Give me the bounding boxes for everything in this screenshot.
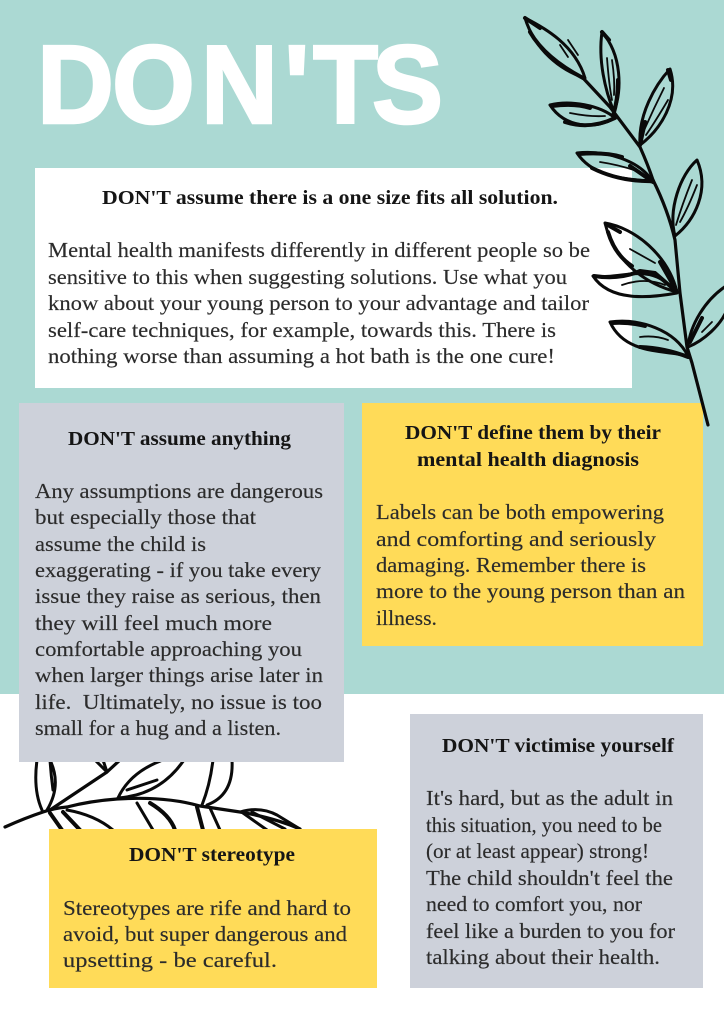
- panel body: define them: illness.: [376, 606, 437, 630]
- panel body: victimise: need to comfort you, nor: [426, 892, 642, 916]
- panel body: define them: Labels can be both empowering: [376, 500, 664, 524]
- panel body: one size: nothing worse than assuming a hot bath is the one cure!: [48, 344, 555, 368]
- panel body: assume anything: life. Ultimately, no issue is too: [35, 690, 322, 714]
- panel heading: define them: DON'T define them by their: [405, 422, 661, 444]
- panel: define them: [362, 403, 703, 646]
- panel body: victimise: feel like a burden to you for: [426, 919, 675, 943]
- teal background: [0, 0, 724, 694]
- panel body: victimise: this situation, you need to be: [426, 813, 662, 837]
- panel body: victimise: (or at least appear) strong!: [426, 839, 649, 863]
- panel body: assume anything: small for a hug and a listen.: [35, 716, 281, 740]
- panel heading: stereotype: DON'T stereotype: [129, 844, 295, 866]
- panel body: assume anything: they will feel much more: [35, 611, 272, 635]
- panel body: assume anything: when larger things arise later in: [35, 663, 323, 687]
- panel: assume anything: [19, 403, 344, 762]
- panel heading: define them: mental health diagnosis: [417, 449, 639, 471]
- icon: lower leaf branch: [5, 760, 300, 830]
- panel heading: assume anything: DON'T assume anything: [68, 428, 292, 450]
- panel body: stereotype: [63, 896, 351, 972]
- panel body: one size: self-care techniques, for example, towards this. There is: [48, 318, 556, 342]
- panel body: stereotype: Stereotypes are rife and hard to: [63, 896, 351, 920]
- panel body: assume anything: Any assumptions are dangerous: [35, 479, 323, 503]
- icon: upper leaf branch: [525, 18, 724, 425]
- panel body: one size: know about your young person to your advantage and tailor: [48, 291, 589, 315]
- panel heading: one size: DON'T assume there is a one size fits all solution.: [102, 187, 558, 209]
- panel body: assume anything: [35, 479, 323, 740]
- panel body: define them: [376, 500, 685, 630]
- panel: stereotype: [49, 829, 377, 988]
- panel body: assume anything: comfortable approaching you: [35, 637, 302, 661]
- panel body: stereotype: avoid, but super dangerous and: [63, 922, 347, 946]
- panel: victimise yourself: [410, 714, 703, 988]
- panel body: stereotype: upsetting - be careful.: [63, 948, 277, 972]
- panel body: one size: Mental health manifests differently in different people so be: [48, 238, 590, 262]
- panel body: victimise: It's hard, but as the adult in: [426, 786, 673, 810]
- panel body: assume anything: but especially those that: [35, 505, 256, 529]
- panel body: victimise: [426, 786, 675, 969]
- panel body: assume anything: exaggerating - if you take every: [35, 558, 321, 582]
- panel body: define them: damaging. Remember there is: [376, 553, 646, 577]
- panel body: assume anything: issue they raise as serious, then: [35, 584, 321, 608]
- panel body: define them: more to the young person than an: [376, 579, 685, 603]
- panel body: one size: sensitive to this when suggesting solutions. Use what you: [48, 265, 567, 289]
- panel body: one size: [48, 238, 590, 368]
- panel body: victimise: talking about their health.: [426, 945, 660, 969]
- title: DON'TS: [37, 24, 443, 147]
- panel heading: define them: [405, 422, 661, 471]
- panel body: assume anything: assume the child is: [35, 532, 206, 556]
- panel heading: victimise: DON'T victimise yourself: [442, 735, 675, 757]
- panel body: define them: and comforting and seriously: [376, 527, 656, 551]
- panel: one size fits all: [35, 168, 632, 388]
- panel body: victimise: The child shouldn't feel the: [426, 866, 673, 890]
